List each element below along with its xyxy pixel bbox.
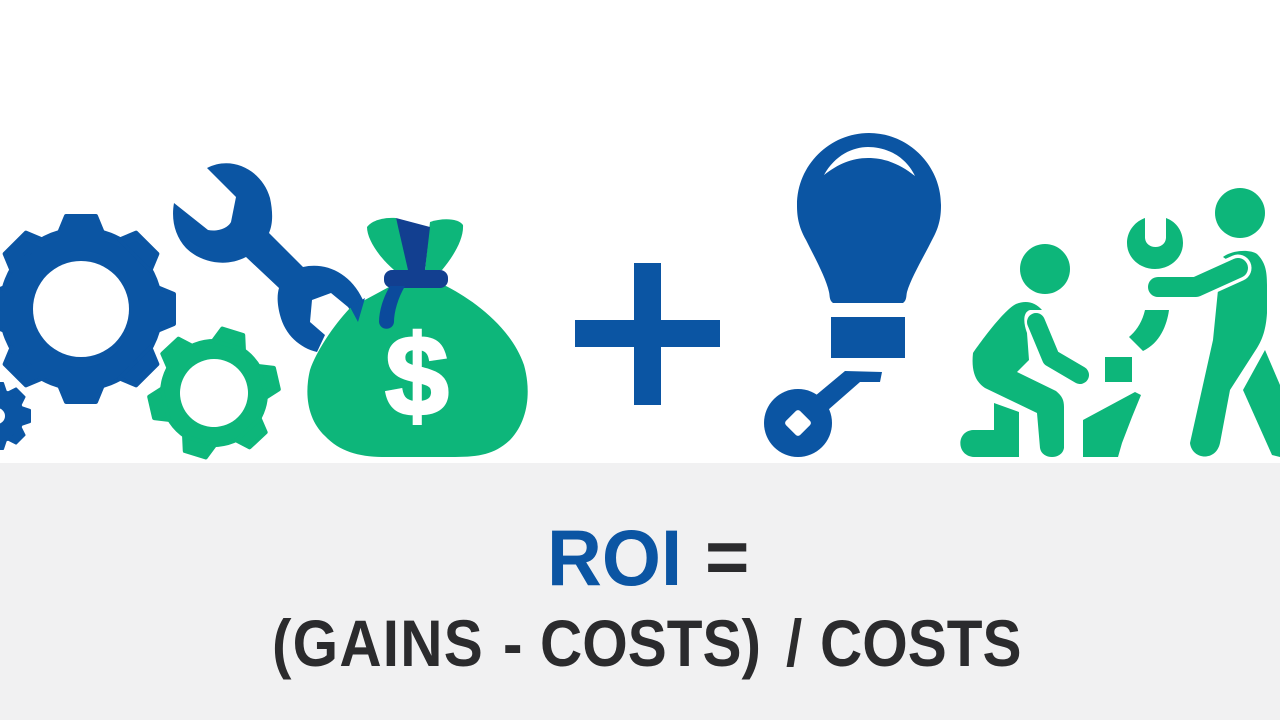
formula text: (GAINS bbox=[272, 608, 484, 681]
formula text: - bbox=[503, 608, 522, 681]
icon: small blue gear bbox=[0, 383, 30, 449]
bulb glass bbox=[797, 133, 941, 303]
shared wrench handle bbox=[1129, 310, 1169, 351]
bulb base bbox=[831, 317, 905, 358]
bag tie tail bbox=[379, 286, 405, 329]
right worker arm bbox=[1158, 268, 1238, 287]
formula panel background bbox=[0, 463, 1280, 720]
key hole bbox=[784, 409, 812, 437]
box bbox=[1105, 357, 1132, 382]
bag body bbox=[307, 285, 528, 457]
bulb highlight bbox=[824, 147, 915, 176]
right worker head bbox=[1215, 188, 1265, 238]
right worker arm outline bbox=[1180, 268, 1238, 287]
shared wrench head bbox=[1127, 218, 1183, 269]
icon: two workers bbox=[960, 188, 1280, 457]
right worker body bbox=[1190, 251, 1267, 457]
right worker rear leg bbox=[1243, 350, 1280, 457]
dollar sign: $ bbox=[385, 313, 449, 440]
formula text: COSTS) bbox=[540, 608, 761, 681]
left worker rear leg bbox=[960, 403, 1019, 457]
formula text: / bbox=[786, 608, 802, 681]
bag tie knot bbox=[384, 270, 448, 288]
formula heading: ROI: ROI bbox=[547, 515, 682, 602]
left worker head bbox=[1020, 244, 1070, 294]
icon: money bag bbox=[307, 218, 528, 457]
key ring bbox=[764, 389, 832, 457]
icon: green gear bbox=[135, 313, 293, 473]
key handle bbox=[815, 371, 882, 410]
icon: light bulb bbox=[764, 133, 941, 457]
formula equals sign: = bbox=[705, 515, 749, 600]
bag centre fold bbox=[396, 218, 430, 270]
bag right flap bbox=[425, 219, 463, 270]
plus sign bbox=[575, 263, 720, 405]
left worker body bbox=[973, 302, 1064, 457]
wrench tip over bag bbox=[350, 298, 365, 322]
formula text: COSTS bbox=[820, 608, 1021, 681]
lower block bbox=[1083, 392, 1141, 457]
icon: large blue gear bbox=[0, 216, 174, 402]
icon: wrench bbox=[173, 163, 363, 352]
left worker arm bbox=[1036, 322, 1080, 375]
bag left flap bbox=[367, 218, 410, 270]
